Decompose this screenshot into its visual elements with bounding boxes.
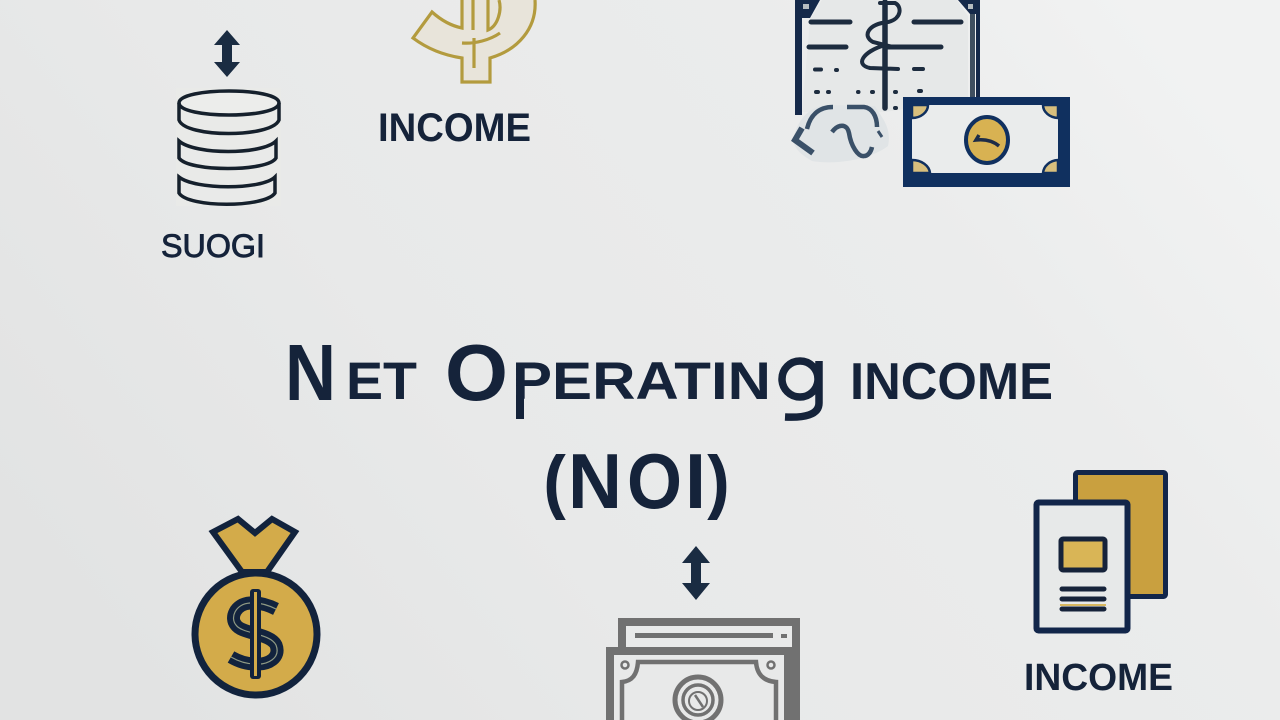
icon: grey banknote stack <box>610 622 796 720</box>
icon: banknote <box>903 97 1070 187</box>
title: Net Operating Income (NOI) <box>285 328 1053 525</box>
title: Net Operating Income (NOI): ET <box>346 352 417 411</box>
icon: coin stack <box>176 88 281 206</box>
icon: scribbled cloud <box>793 105 889 162</box>
title: Net Operating Income (NOI): PERATIN <box>512 352 771 411</box>
title: P descender <box>516 395 524 419</box>
icon: money bag <box>195 519 317 695</box>
title: abbreviation: I <box>685 437 706 525</box>
icon: document with currency symbol <box>795 0 980 115</box>
title: abbreviation: N <box>568 437 622 525</box>
title: abbreviation: ) <box>708 442 729 520</box>
icon: overlapping documents <box>1036 472 1166 630</box>
label: SUOGI: SUOGI <box>161 228 265 264</box>
title: abbreviation: O <box>627 437 682 525</box>
icon: double arrow above coin stack <box>214 30 240 77</box>
icon: gold currency symbol <box>413 0 535 82</box>
title: abbreviation: ( <box>544 442 566 520</box>
title: Net Operating Income (NOI): N <box>285 328 336 417</box>
title: letter g <box>782 361 819 417</box>
icon: double arrow above bill <box>682 546 710 600</box>
label: INCOME (top): INCOME <box>378 106 531 150</box>
title: Net Operating Income (NOI): INCOME <box>850 353 1053 411</box>
title: Net Operating Income (NOI): O <box>445 328 508 417</box>
label: INCOME (bottom right): INCOME <box>1024 657 1173 699</box>
